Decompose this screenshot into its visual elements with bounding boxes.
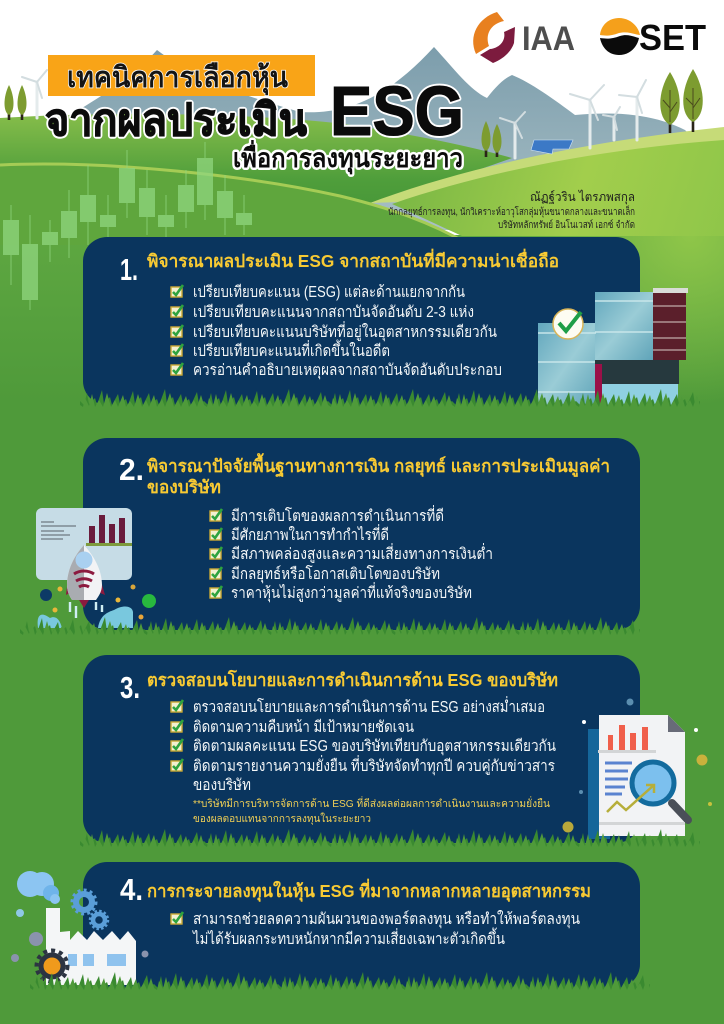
title tag — [48, 55, 315, 96]
wind turbines — [22, 70, 646, 158]
checklist 3: ของบริษัท — [193, 777, 251, 794]
panel 3 — [83, 655, 640, 843]
grass strip 4 — [30, 968, 650, 998]
report text lines — [605, 763, 632, 794]
right lime hill — [370, 127, 724, 203]
logo: SET: SET — [639, 17, 706, 58]
trend arrow — [607, 785, 654, 812]
back hill — [0, 114, 512, 245]
icon: rocket and dashboard — [36, 508, 156, 628]
logo: IAA: IAA — [522, 20, 575, 58]
checklist 2: มีการเติบโตของผลการดำเนินการที่ดี — [231, 505, 444, 525]
checklist 2: มีสภาพคล่องสูงและความเสี่ยงทางการเงินต่ำ — [231, 543, 493, 564]
heading 3: ตรวจสอบนโยบายและการดำเนินการด้าน ESG ของบริษัท — [147, 669, 558, 690]
checklist 4: สามารถช่วยลดความผันผวนของพอร์ตลงทุน หรือทำให้พอร์ตลงทุน — [193, 910, 580, 929]
dashboard card — [36, 508, 132, 580]
trees — [4, 69, 703, 157]
checklist 1: เปรียบเทียบคะแนน (ESG) แต่ละด้านแยกจากกัน — [193, 284, 465, 301]
heading 1: พิจารณาผลประเมิน ESG จากสถาบันที่มีความน่าเชื่อถือ — [147, 248, 559, 271]
checklist 4 — [171, 910, 580, 948]
checklist 3: ติดตามความคืบหน้า มีเป้าหมายชัดเจน — [193, 718, 414, 736]
solar panel — [531, 140, 573, 154]
panel 4 — [83, 862, 640, 988]
check badge — [553, 309, 583, 339]
checklist 2: มีศักยภาพในการทำกำไรที่ดี — [231, 524, 389, 544]
checklist 1: เปรียบเทียบคะแนนบริษัทที่อยู่ในอุตสาหกรรมเดียวกัน — [193, 321, 497, 342]
title main: ESG — [330, 72, 464, 150]
blue gears — [72, 890, 108, 929]
note: **บริษัทมีการบริหารจัดการด้าน ESG ที่ดีส่งผลต่อผลการดำเนินงานและความยั่งยืน — [193, 796, 550, 810]
report bars — [608, 725, 648, 750]
magnifier — [632, 762, 688, 820]
panel 2 — [83, 438, 640, 630]
smoke — [17, 871, 60, 904]
author credit: ณัฏฐ์วริน ไตรภพสกุล — [530, 190, 635, 205]
grass strip 2 — [20, 613, 640, 643]
checklist 2: มีกลยุทธ์หรือโอกาสเติบโตของบริษัท — [231, 565, 440, 584]
logo: IAA — [473, 12, 575, 63]
checklist 3: ตรวจสอบนโยบายและการดำเนินการด้าน ESG อย่างสม่ำเสมอ — [193, 696, 545, 716]
logo: SET — [600, 17, 706, 58]
grass strip 1 — [80, 385, 700, 415]
checklist 4: ไม่ได้รับผลกระทบหนักหากมีความเสี่ยงเฉพาะตัวเกิดขึ้น — [191, 927, 505, 948]
author credit: นักกลยุทธ์การลงทุน, นักวิเคราะห์อาวุโสกลุ่มหุ้นขนาดกลางและขนาดเล็ก — [388, 204, 635, 218]
title main: เพื่อการลงทุนระยะยาว — [233, 139, 463, 175]
title main: จากผลประเมิน — [45, 96, 307, 145]
number 3: 3. — [120, 670, 140, 705]
checklist 3: ติดตามรายงานความยั่งยืน ที่บริษัทจัดทำทุกปี ควบคู่กับข่าวสาร — [193, 755, 555, 776]
icon: report and magnifier — [562, 698, 712, 839]
author credit: บริษัทหลักทรัพย์ อินโนเวสท์ เอกซ์ จำกัด — [498, 218, 635, 231]
dots — [11, 909, 148, 962]
grass strip 3 — [80, 825, 700, 855]
lower hill with light band — [0, 164, 470, 245]
checklist 1: เปรียบเทียบคะแนนที่เกิดขึ้นในอดีต — [193, 339, 390, 360]
heading 2 — [147, 453, 610, 497]
header landscape scene — [0, 47, 724, 245]
rocket — [66, 545, 105, 608]
author credit — [388, 190, 635, 231]
checklist 1 — [171, 284, 502, 380]
note — [193, 796, 550, 825]
checklist 3: ติดตามผลคะแนน ESG ของบริษัทเทียบกับอุตสาหกรรมเดียวกัน — [193, 738, 556, 756]
heading 2: ของบริษัท — [147, 477, 221, 497]
heading 4: การกระจายลงทุนในหุ้น ESG ที่มาจากหลากหลายอุตสาหกรรม — [147, 878, 591, 902]
decorative dots — [562, 698, 712, 832]
number 2: 2. — [119, 452, 144, 487]
checklist 3 — [171, 696, 556, 794]
checklist 1: เปรียบเทียบคะแนนจากสถาบันจัดอันดับ 2-3 แห่ง — [193, 304, 474, 321]
factory body — [46, 908, 136, 985]
number 4: 4. — [120, 872, 143, 907]
heading 2: พิจารณาปัจจัยพื้นฐานทางการเงิน กลยุทธ์ และการประเมินมูลค่า — [147, 453, 610, 478]
title main: ESG — [330, 72, 464, 150]
icon: factory — [11, 871, 148, 985]
windows — [68, 954, 126, 966]
dark gear — [36, 950, 68, 982]
checklist 2 — [210, 505, 493, 603]
candlestick chart — [3, 142, 252, 310]
note: ของผลตอบแทนจากการลงทุนในระยะยาว — [193, 812, 371, 825]
decorative dots and clouds — [38, 584, 156, 628]
checklist 2: ราคาหุ้นไม่สูงกว่ามูลค่าที่แท้จริงของบริษัท — [231, 582, 472, 603]
title tag: เทคนิคการเลือกหุ้น — [67, 62, 288, 95]
checklist 1: ควรอ่านคำอธิบายเหตุผลจากสถาบันจัดอันดับประกอบ — [193, 362, 502, 380]
panel 1 — [83, 237, 640, 405]
icon: office buildings — [538, 288, 688, 407]
title main — [45, 72, 464, 175]
number 1: 1. — [120, 252, 138, 287]
title main: จากผลประเมิน — [45, 96, 307, 145]
mountains — [60, 47, 705, 230]
